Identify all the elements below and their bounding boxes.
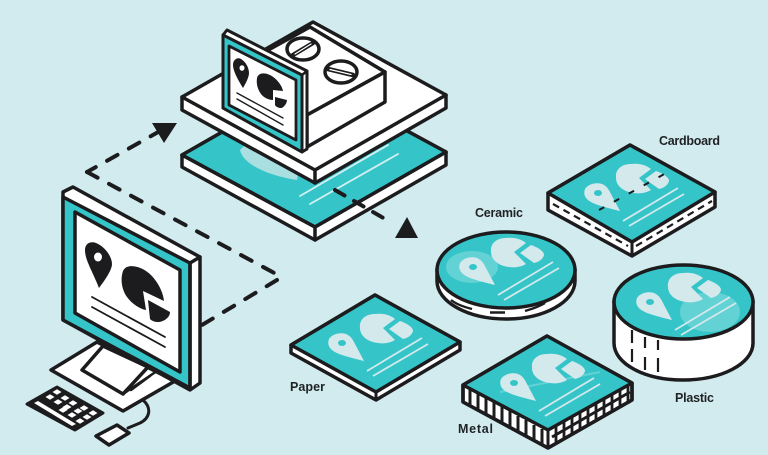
print head box (232, 27, 385, 147)
tile: metal (463, 336, 632, 448)
lower plate (182, 80, 446, 240)
printer screen (223, 30, 307, 152)
label: metal: Metal (458, 422, 493, 436)
label: paper: Paper (290, 380, 325, 394)
stand base (51, 342, 175, 411)
tile: cardboard (548, 145, 715, 256)
tile: plastic (614, 265, 753, 380)
dashed arrow: printer to materials (335, 190, 418, 238)
upper plate (182, 22, 446, 183)
computer (27, 187, 200, 445)
label: ceramic: Ceramic (475, 206, 523, 220)
printer (182, 22, 446, 240)
tile: paper (291, 295, 460, 400)
screw (325, 61, 357, 83)
label: cardboard: Cardboard (659, 134, 720, 148)
screw (287, 38, 319, 60)
dashed arrow: monitor to printer (87, 123, 278, 325)
keyboard (27, 387, 103, 430)
mouse and cable (96, 400, 149, 445)
tile: ceramic (437, 232, 575, 319)
label: plastic: Plastic (675, 391, 714, 405)
monitor artwork (85, 242, 170, 322)
monitor (63, 187, 200, 390)
